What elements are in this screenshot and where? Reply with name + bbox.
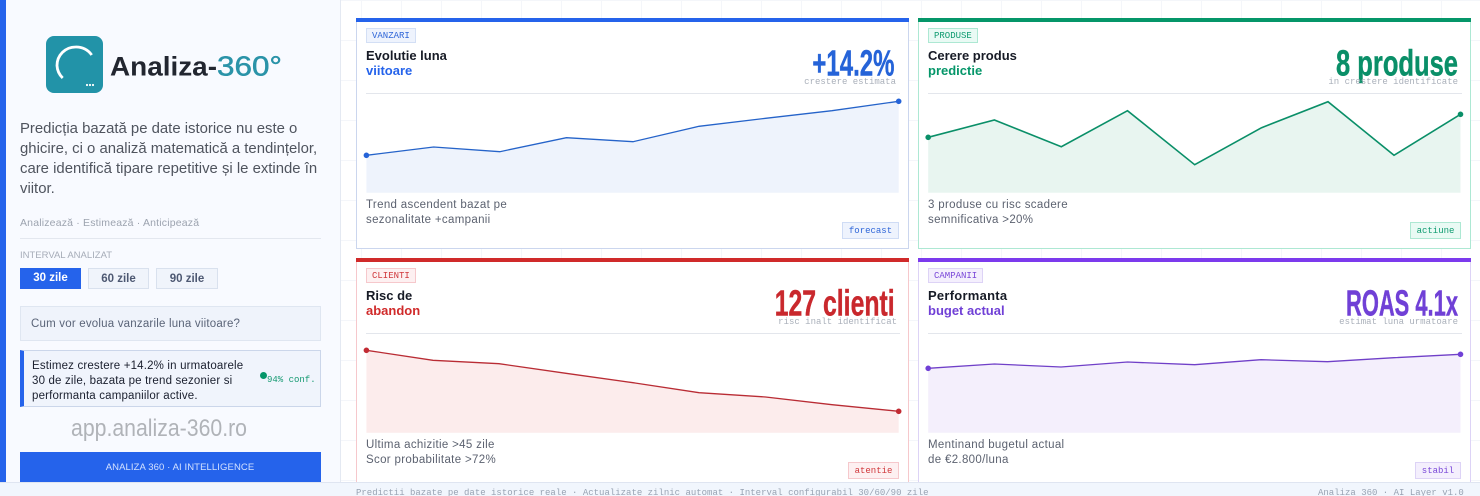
subheading: abandon	[366, 303, 420, 318]
question box: Cum vor evolua vanzarile luna viitoare?	[31, 318, 240, 330]
badge: atentie	[855, 466, 892, 476]
tag: CLIENTI	[372, 271, 410, 281]
cta bar	[20, 452, 321, 482]
metric caption: risc inalt identificat	[778, 317, 897, 327]
button: 60 zile	[88, 268, 149, 289]
description: Mentinand bugetul actual	[928, 439, 1064, 451]
intro paragraph: viitor.	[20, 181, 55, 197]
metric caption: crestere estimata	[804, 77, 896, 87]
description: Ultima achizitie >45 zile	[366, 439, 495, 451]
badge	[1410, 222, 1461, 239]
badge	[1415, 462, 1461, 479]
description: 3 produse cu risc scadere	[928, 199, 1068, 211]
description: Scor probabilitate >72%	[366, 454, 496, 466]
tag	[928, 268, 983, 283]
url: app.analiza-360.ro	[71, 415, 247, 442]
heading: Cerere produs	[928, 48, 1017, 63]
question box	[20, 306, 321, 341]
panel: clienti	[356, 258, 909, 496]
subheading: predictie	[928, 63, 982, 78]
metric caption: in crestere identificate	[1328, 77, 1458, 87]
line chart	[364, 348, 902, 433]
confidence label: 94% conf.	[267, 375, 316, 385]
panel: campanii	[918, 258, 1471, 496]
description: semnificativa >20%	[928, 214, 1033, 226]
line chart	[925, 100, 1464, 193]
line chart	[364, 98, 902, 193]
metric: 127 clienti	[775, 283, 895, 324]
logo	[46, 36, 282, 93]
description: de €2.800/luna	[928, 454, 1009, 466]
tag	[366, 28, 416, 43]
tag	[366, 268, 416, 283]
tag: PRODUSE	[934, 31, 972, 41]
answer text: Estimez crestere +14.2% in urmatoarele	[32, 360, 243, 372]
description	[928, 439, 1064, 466]
badge	[848, 462, 899, 479]
description: Trend ascendent bazat pe	[366, 199, 507, 211]
tag: VANZARI	[372, 31, 410, 41]
intro paragraph	[20, 121, 317, 197]
panel: vanzari	[356, 18, 909, 249]
button: 90 zile: 90 zile	[170, 273, 204, 285]
answer text	[32, 360, 243, 402]
badge: actiune	[1417, 226, 1454, 236]
logo: 360°	[217, 50, 282, 82]
answer box	[20, 350, 321, 407]
badge: stabil	[1422, 466, 1454, 476]
button: 30 zile: 30 zile	[33, 272, 68, 284]
badge	[842, 222, 899, 239]
intro paragraph: ghicire, ci o analiză matematică a tendințelor,	[20, 141, 317, 157]
subheading: viitoare	[366, 63, 412, 78]
badge: forecast	[849, 226, 892, 236]
tag: CAMPANII	[934, 271, 977, 281]
intro paragraph: care identifică tipare repetitive și le extinde în	[20, 161, 317, 177]
accent stripe	[0, 0, 6, 496]
answer text: performanta campaniilor active.	[32, 390, 198, 402]
cta bar: ANALIZA 360 · AI INTELLIGENCE	[106, 462, 254, 473]
logo: Analiza-	[110, 52, 217, 82]
panel: sidebar	[0, 0, 341, 496]
tag	[928, 28, 978, 43]
footer	[0, 482, 1480, 496]
metric caption: estimat luna urmatoare	[1339, 317, 1458, 327]
subheading: buget actual	[928, 303, 1005, 318]
heading: Performanta	[928, 288, 1007, 303]
line chart	[925, 352, 1464, 432]
panel: produse	[918, 18, 1471, 249]
description	[928, 199, 1068, 226]
metric: +14.2%	[812, 43, 894, 84]
description: sezonalitate +campanii	[366, 214, 491, 226]
button: 90 zile	[156, 268, 218, 289]
description	[366, 439, 496, 466]
description	[366, 199, 507, 226]
confidence dot	[260, 372, 267, 379]
interval label: INTERVAL ANALIZAT	[20, 250, 112, 261]
tagline: Analizează · Estimează · Anticipează	[20, 217, 199, 229]
intro paragraph: Predicția bazată pe date istorice nu este o	[20, 121, 297, 137]
heading: Risc de	[366, 288, 412, 303]
answer text: 30 de zile, bazata pe trend sezonier si	[32, 375, 232, 387]
button: 60 zile: 60 zile	[101, 273, 136, 285]
heading: Evolutie luna	[366, 48, 447, 63]
divider	[20, 238, 321, 239]
button: 30 zile	[20, 268, 81, 289]
